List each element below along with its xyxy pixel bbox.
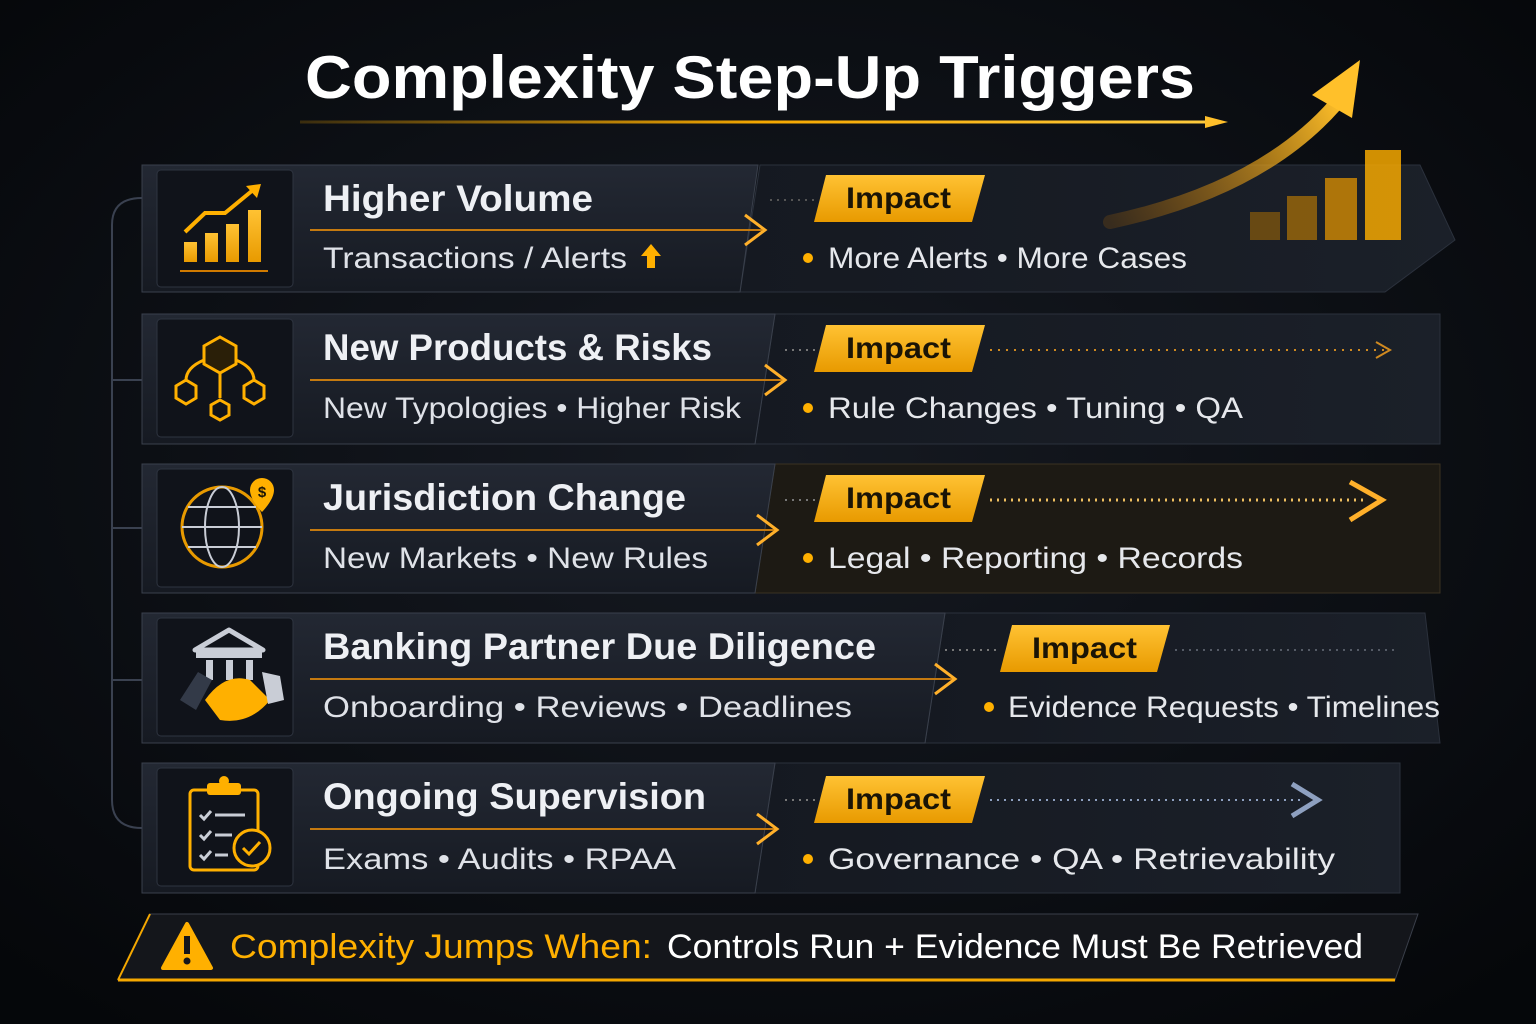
impact badge [814,175,985,222]
impact badge: Impact [846,482,951,515]
row 3: Jurisdiction Change: New Markets • New Rules [323,542,708,575]
callout: bottom banner [118,914,1418,980]
row 2: New Products & Risks: Rule Changes • Tuning • QA [828,392,1243,425]
icon: globe with pin: $ [258,484,267,501]
icon: warning [163,924,211,968]
row 4: Banking Partner Due Diligence: Onboarding • Reviews • Deadlines [323,691,852,724]
row 3: Jurisdiction Change: Jurisdiction Change [323,477,686,518]
impact badge: Impact [1032,632,1137,665]
row 5: Ongoing Supervision: Exams • Audits • RPAA [323,843,676,876]
icon: clipboard check [157,768,293,886]
impact badge [814,475,985,522]
row 1: Higher Volume: More Alerts • More Cases [828,242,1187,275]
callout: bottom banner: Complexity Jumps When: [230,928,652,966]
connector bracket [112,198,142,828]
row 2: New Products & Risks: New Typologies • Higher Risk [323,392,742,425]
impact badge [1000,625,1170,672]
row 5: Ongoing Supervision: Governance • QA • Retrievability [828,843,1335,876]
impact badge: Impact [846,332,951,365]
row 5: Ongoing Supervision: Ongoing Supervision [323,776,706,817]
icon: rising arrow with bars [1110,60,1401,240]
row 1: Higher Volume [142,165,1455,292]
icon: bar chart [157,170,293,287]
impact badge [814,325,985,372]
row 5: Ongoing Supervision [142,763,1400,893]
row 4: Banking Partner Due Diligence: Evidence Requests • Timelines [1008,691,1440,724]
row 3: Jurisdiction Change [142,464,1440,593]
row 4: Banking Partner Due Diligence [142,613,1440,743]
row 3: Jurisdiction Change: Legal • Reporting • Records [828,542,1243,575]
row 4: Banking Partner Due Diligence: Banking Partner Due Diligence [323,626,876,667]
impact badge [814,776,985,823]
icon: globe with pin [157,469,293,587]
row 1: Higher Volume: Higher Volume [323,178,593,219]
callout: bottom banner: Controls Run + Evidence Must Be Retrieved [667,928,1363,966]
impact badge: Impact [846,783,951,816]
title: Complexity Step-Up Triggers [305,44,1195,111]
row 2: New Products & Risks [142,314,1440,444]
row 1: Higher Volume: Transactions / Alerts [323,242,627,275]
icon: cubes network [157,319,293,437]
row 2: New Products & Risks: New Products & Risks [323,327,712,368]
icon: bank handshake [157,618,293,736]
impact badge: Impact [846,182,951,215]
